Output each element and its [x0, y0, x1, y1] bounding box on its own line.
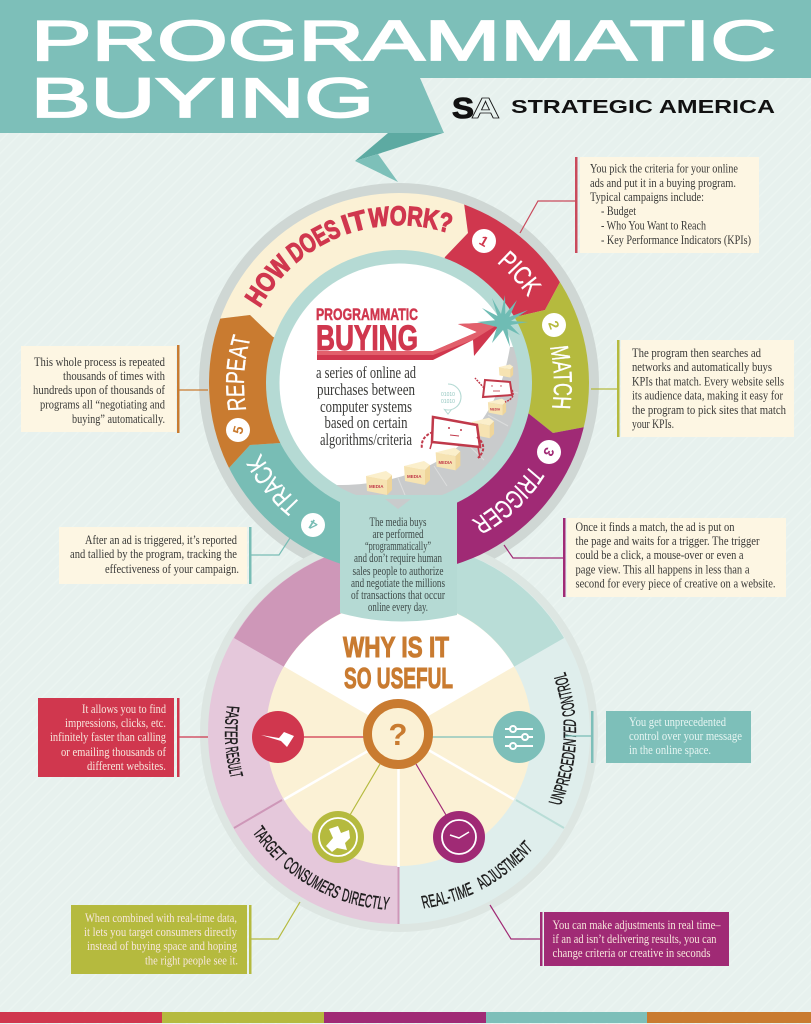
callout: real-time adjustment: You can make adjustments in real time– [552, 917, 721, 932]
callout: faster result: It allows you to find [82, 701, 166, 716]
step 4: track [246, 453, 325, 537]
illustration: speech bubble: 01010 [441, 399, 455, 405]
callout: target consumers: instead of buying space and hoping [87, 938, 237, 953]
callout: target consumers: the right people see it. [145, 952, 238, 968]
center circle [266, 250, 532, 503]
center heading: programmatic buying: PROGRAMMATIC [316, 305, 418, 324]
header banner [0, 0, 811, 182]
callout: target consumers: it lets you target consumers directly [84, 924, 237, 939]
callout: repeat: hundreds upon of thousands of [33, 382, 166, 397]
callout: trigger: Once it finds a match, the ad is put on [576, 519, 735, 534]
text: media buys: online every day. [368, 599, 428, 614]
callout: pick: - Budget [601, 203, 636, 218]
conveyor [337, 347, 519, 495]
step 3: trigger: 3 [540, 445, 558, 459]
label: unprecedented control: UNPRECEDENTED [548, 720, 576, 804]
icon: red arrow [317, 322, 502, 360]
icon: sliders [493, 711, 545, 763]
step 4: track: 4 [305, 516, 320, 534]
callout: unprecedented control [565, 711, 751, 763]
center description text: a series of online ad [316, 363, 417, 382]
callout: repeat: programs all “negotiating and [40, 396, 165, 412]
panel: media buys column [340, 495, 457, 622]
step 1: pick: 1 [477, 232, 492, 250]
callout: faster result: different websites. [87, 758, 166, 773]
callout: repeat: thousands of times with [63, 368, 165, 383]
callout: real-time adjustment [490, 905, 729, 966]
callout: track: After an ad is triggered, it’s reported [85, 532, 237, 547]
icon: target consumers [312, 811, 364, 863]
logo: Strategic America: STRATEGIC AMERICA [511, 97, 775, 117]
label: unprecedented control [548, 672, 576, 804]
icon: question mark: ? [389, 717, 407, 752]
center description text [316, 363, 417, 449]
callout: track [59, 527, 290, 584]
callout: repeat [21, 345, 208, 433]
callout: pick: Typical campaigns include: [590, 189, 704, 204]
callout: real-time adjustment: if an ad isn’t delivering results, you can [552, 931, 717, 946]
illustration: speech bubble: 01010 [441, 392, 455, 398]
center description text: based on certain [324, 413, 408, 432]
heading: why is it so useful: SO USEFUL [344, 663, 453, 695]
step 1: pick [472, 229, 542, 298]
label: target consumers directly: TARGET [254, 824, 288, 861]
step 2: match: MATCH [550, 346, 572, 408]
step 4: track: TRACK [246, 453, 298, 516]
icon: clock [433, 811, 485, 863]
callout: trigger: page view. This all happens in less than a [576, 562, 750, 576]
text: media buys: and don’t require human [354, 550, 442, 565]
footer colour bar [0, 1012, 811, 1023]
callout: unprecedented control: in the online space. [629, 742, 711, 757]
heading: why is it so useful [343, 632, 453, 695]
text: media buys: and negotiate the millions [351, 575, 445, 590]
heading: how does it work: WORK? [368, 206, 452, 232]
label: target consumers directly [254, 824, 390, 910]
callout: trigger: the page and waits for a trigger. The trigger [576, 533, 760, 548]
center description text: algorithms/criteria [320, 430, 413, 449]
connector lines [300, 737, 500, 815]
logo: Strategic America: S [452, 93, 474, 125]
step 3: trigger: TRIGGER [471, 468, 545, 533]
callout: trigger [504, 518, 786, 597]
heading: why is it so useful: WHY IS IT [343, 632, 449, 664]
callout: match: your KPIs. [632, 416, 674, 431]
text: media buys: of transactions that occur [351, 587, 445, 602]
step 2: match [542, 313, 572, 408]
logo: Strategic America: A [471, 93, 500, 125]
callout: target consumers: When combined with real-time data, [85, 910, 237, 925]
title [31, 9, 776, 129]
illustration: large robot [422, 417, 483, 458]
illustration: media boxes: MEDIA [407, 474, 422, 479]
callout: unprecedented control: control over your message [629, 728, 742, 743]
logo: Strategic America [452, 93, 775, 125]
label: real-time adjustment: ADJUSTMENT [476, 840, 532, 890]
callout: faster result: infinitely faster than calling [50, 729, 166, 744]
callout: faster result: or emailing thousands of [61, 744, 167, 759]
label: target consumers directly: CONSUMERS [284, 857, 341, 898]
callout: match [591, 340, 794, 437]
callout: repeat: buying” automatically. [72, 411, 165, 426]
callout: pick: - Who You Want to Reach [601, 218, 706, 232]
text: media buys: “programmatically” [365, 538, 431, 553]
illustration: media boxes [366, 364, 513, 495]
center description text: purchases between [317, 380, 415, 399]
label: faster result: FASTER [224, 706, 240, 744]
illustration: media boxes: MEDIA [369, 484, 384, 489]
text: media buys [351, 514, 445, 614]
center description text: computer systems [320, 397, 412, 416]
callout: trigger: could be a click, a mouse-over or even a [576, 547, 744, 562]
label: faster result [224, 706, 244, 776]
callout: match: networks and automatically buys [632, 359, 772, 374]
grey outer rings [199, 183, 599, 932]
panel: how does it work ring [209, 193, 589, 564]
callout: faster result: impressions, clicks, etc. [65, 715, 166, 730]
callout: pick: You pick the criteria for your online [590, 160, 738, 176]
callout: match: The program then searches ad [632, 345, 761, 360]
callout: faster result [38, 698, 208, 777]
label: real-time adjustment [421, 840, 532, 908]
icon: question mark [368, 704, 428, 764]
callout: track: and tallied by the program, tracking the [70, 546, 237, 561]
text: media buys: sales people to authorize [352, 563, 444, 578]
illustration: small robot [475, 378, 513, 402]
callout: real-time adjustment: change criteria or creative in seconds [552, 945, 710, 960]
callout: target consumers [71, 902, 300, 974]
label: real-time adjustment: REAL-TIME [421, 882, 474, 908]
callout: pick: ads and put it in a buying program. [590, 175, 736, 190]
step 3: trigger [471, 440, 561, 533]
white wedge [284, 600, 514, 733]
center heading: programmatic buying: BUYING [316, 319, 418, 358]
center heading: programmatic buying [316, 305, 418, 358]
step 5: repeat [226, 334, 250, 442]
label: faster result: RESULT [226, 746, 244, 776]
callout: track: effectiveness of your campaign. [105, 561, 239, 576]
illustration: speech bubble [441, 384, 461, 414]
label: unprecedented control: CONTROL [554, 672, 576, 716]
heading: how does it work: DOES [285, 220, 340, 264]
illustration: media boxes: MEDIA [490, 408, 501, 412]
heading: how does it work [244, 206, 452, 308]
title: PROGRAMMATIC [31, 9, 776, 73]
cream inner sectors [266, 600, 532, 866]
step 2: match: 2 [545, 319, 563, 332]
illustration: media boxes: MEDIA [439, 460, 452, 465]
step 5: repeat: REPEAT [226, 334, 250, 410]
text: media buys: The media buys [370, 514, 426, 529]
callout: repeat: This whole process is repeated [34, 354, 165, 369]
text: media buys: are performed [372, 526, 424, 541]
step 1: pick: PICK [498, 250, 542, 298]
step 5: repeat: 5 [229, 424, 247, 436]
icon: lightning [252, 711, 304, 763]
title: BUYING [31, 66, 374, 129]
callout: pick: - Key Performance Indicators (KPIs) [601, 232, 751, 247]
panel: why is it so useful circle [208, 558, 590, 924]
label: target consumers directly: DIRECTLY [342, 888, 390, 910]
heading: how does it work: HOW [244, 252, 291, 308]
callout: unprecedented control: You get unprecedented [629, 714, 726, 729]
heading: how does it work: IT [340, 209, 365, 234]
icon: teal starburst [477, 295, 528, 347]
callout: pick [520, 157, 759, 253]
